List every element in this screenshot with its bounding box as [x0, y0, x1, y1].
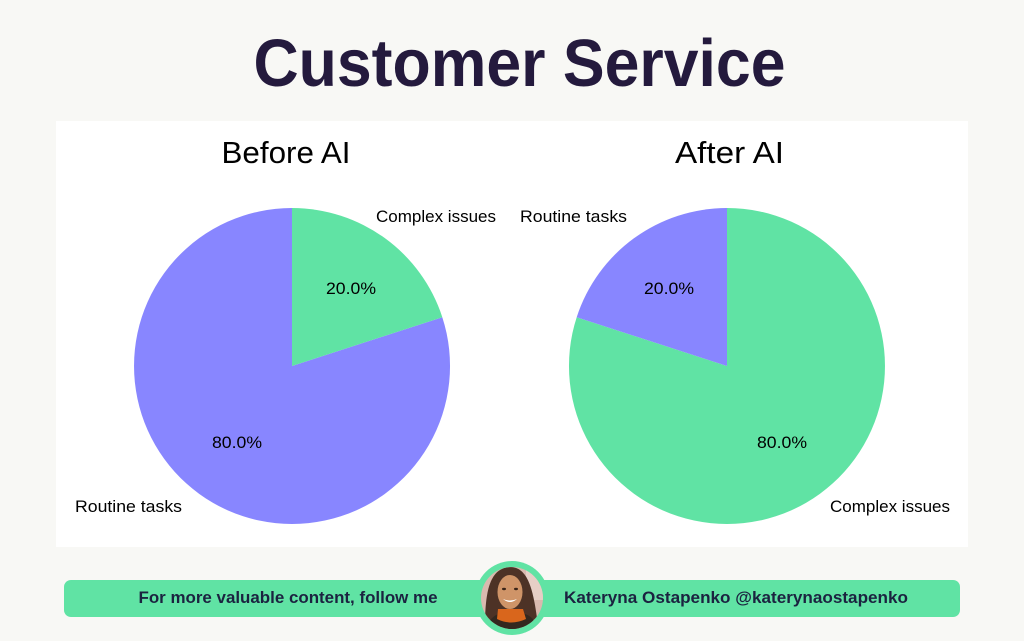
label: routine tasks: Routine tasks — [75, 497, 182, 516]
footer text: call to action: For more valuable content, follow me — [138, 588, 438, 607]
panel: after AI pie chart — [520, 135, 950, 524]
value: 20.0%: 20.0% — [644, 279, 694, 298]
slice: complex issues 20% — [292, 208, 442, 366]
slice: routine tasks 80% — [134, 208, 450, 524]
label: complex issues: Complex issues — [830, 497, 950, 516]
value: 80.0%: 80.0% — [212, 433, 262, 452]
slice: routine tasks 20% — [577, 208, 727, 366]
value: 80.0%: 80.0% — [757, 433, 807, 452]
value: 20.0%: 20.0% — [326, 279, 376, 298]
panel: before AI pie chart — [75, 135, 496, 524]
panel: charts — [56, 121, 968, 547]
slice: complex issues 80% — [569, 208, 885, 524]
footer banner — [64, 580, 960, 617]
heading: After AI: After AI — [675, 135, 784, 170]
label: complex issues: Complex issues — [376, 207, 496, 226]
icon: author portrait — [480, 561, 544, 635]
label: routine tasks: Routine tasks — [520, 207, 627, 226]
title: Customer Service — [254, 26, 786, 101]
footer text: author: Kateryna Ostapenko @katerynaostapenko — [564, 588, 908, 607]
heading: Before AI: Before AI — [222, 135, 350, 170]
